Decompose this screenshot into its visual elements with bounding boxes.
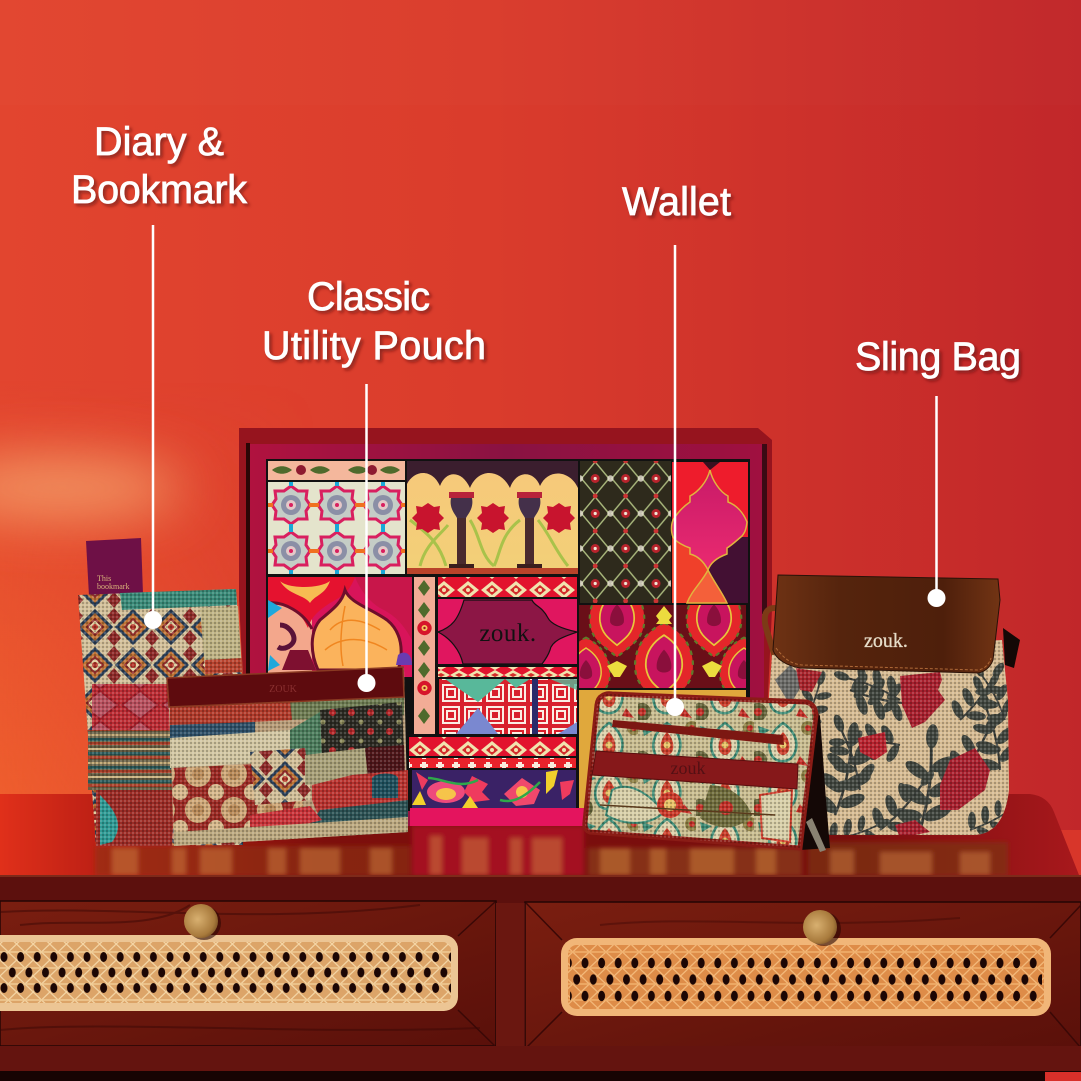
panel: arches	[407, 461, 578, 574]
label: wallet: Wallet	[622, 180, 731, 224]
wallet zipper pull	[806, 818, 826, 852]
wallet leather strap	[592, 751, 798, 789]
left cane panel	[0, 935, 458, 1011]
panel: cross band	[409, 758, 576, 768]
box bottom flap	[410, 808, 586, 826]
logo: zouk.	[864, 630, 908, 652]
panel: purple floral	[412, 770, 576, 808]
left drawer	[0, 901, 496, 1046]
panel: dark lattice	[580, 461, 671, 603]
lower rail	[0, 1046, 1081, 1071]
sling bag	[762, 574, 1020, 835]
label: sling bag	[855, 335, 1021, 607]
wallet fabric	[585, 694, 816, 848]
pouch leather strip	[167, 667, 404, 707]
label: classic utility pouch: Utility Pouch	[262, 324, 486, 368]
diary	[78, 589, 243, 846]
label: wallet	[622, 180, 731, 716]
panel: zouk logo plaque	[438, 599, 577, 664]
panel: diamond band	[438, 577, 577, 597]
pouch fabric	[168, 668, 408, 846]
panel: ogee floral	[268, 577, 412, 677]
table front rail	[0, 875, 1081, 903]
wooden table	[0, 794, 1081, 1081]
box inner	[250, 444, 764, 826]
label: sling bag: Sling Bag	[855, 335, 1021, 379]
table base shadow	[0, 1071, 1081, 1081]
wallet zip pocket	[612, 720, 784, 745]
right cane panel	[561, 938, 1051, 1016]
sling bag body	[768, 640, 1009, 835]
panel: vertical floral strip	[414, 577, 435, 734]
label: diary and bookmark	[71, 120, 247, 629]
center post	[496, 903, 524, 1048]
wallet	[585, 694, 830, 852]
bookmark text: bookmark	[97, 582, 129, 591]
embossed logo: ZOUK	[269, 684, 298, 695]
logo text: zouk.	[479, 620, 537, 647]
bookmark	[86, 538, 143, 596]
label: classic utility pouch	[262, 275, 486, 692]
panel: pink ogee	[672, 462, 748, 603]
panel: border strip	[268, 461, 405, 480]
gift box	[239, 428, 772, 826]
right drawer	[525, 902, 1081, 1049]
classic utility pouch	[167, 667, 408, 846]
panel: yellow floral fragment	[579, 690, 746, 810]
table reflections	[95, 826, 1008, 876]
wallet logo: zouk	[670, 758, 706, 778]
table top surface	[0, 794, 1081, 880]
panel: maroon paisley	[579, 605, 746, 688]
printed panels backing	[266, 459, 750, 811]
label: classic utility pouch: Classic	[307, 275, 430, 319]
panel: bottom diamond band	[409, 737, 576, 756]
panel: red lattice	[439, 679, 577, 734]
strap	[765, 608, 783, 660]
sling bag flap	[773, 575, 1000, 673]
box lid	[239, 428, 772, 800]
wallet large motifs	[606, 785, 792, 842]
panel: thin diamond band	[438, 667, 577, 677]
right drawer knob	[803, 910, 841, 946]
label: diary and bookmark: Bookmark	[71, 168, 247, 212]
label: diary and bookmark: Diary &	[94, 120, 224, 164]
panel: star tiles	[268, 482, 405, 574]
bookmark text: This	[97, 574, 111, 583]
left drawer knob	[184, 904, 221, 940]
background wall	[0, 0, 1081, 830]
